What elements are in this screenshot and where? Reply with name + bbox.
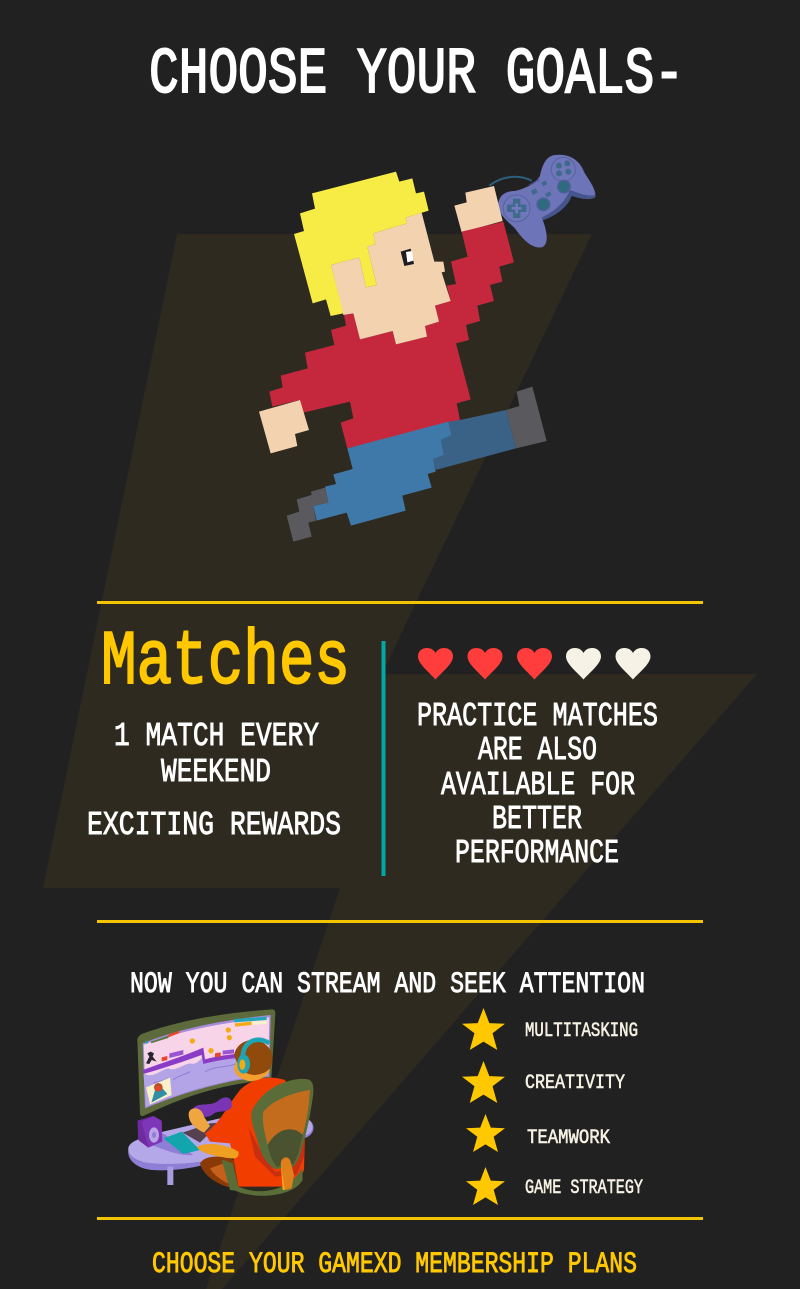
right hand — [454, 186, 503, 232]
label: game strategy: GAME STRATEGY — [525, 1177, 643, 1200]
eye — [401, 249, 414, 266]
desk — [128, 1118, 314, 1185]
star: creativity — [462, 1061, 505, 1103]
game controller held — [193, 1097, 232, 1117]
bottom divider — [97, 1217, 703, 1220]
text: match schedule — [114, 718, 319, 791]
top divider — [97, 601, 703, 604]
vertical divider — [382, 641, 386, 876]
label: teamwork: TEAMWORK — [527, 1127, 610, 1150]
text: match schedule: WEEKEND — [161, 754, 271, 791]
heading: Matches: Matches — [101, 620, 350, 707]
speaker — [138, 1116, 162, 1148]
text: practice matches: ARE ALSO — [478, 732, 597, 769]
text: practice matches: PERFORMANCE — [455, 835, 619, 872]
skills list — [462, 1008, 643, 1205]
text: rewards: EXCITING REWARDS — [87, 807, 341, 844]
star: teamwork — [466, 1114, 505, 1152]
shirt — [269, 222, 514, 448]
hearts rating — [418, 648, 650, 680]
mouse mat — [163, 1132, 200, 1154]
monitor — [137, 1009, 275, 1116]
controller cable — [489, 177, 532, 186]
game controller — [498, 155, 596, 247]
background lightning bolt — [43, 234, 757, 1289]
star: multitasking — [462, 1008, 505, 1050]
text: practice matches: AVAILABLE FOR — [441, 767, 635, 804]
text: practice matches: PRACTICE MATCHES — [417, 698, 658, 735]
light trouser leg — [313, 422, 452, 526]
face — [331, 213, 451, 344]
office chair — [197, 1079, 313, 1196]
left boot — [287, 488, 328, 542]
legs — [200, 1157, 238, 1189]
illustration: streamer at desk — [128, 1009, 314, 1196]
pixel character with controller — [259, 155, 596, 542]
right boot — [506, 387, 547, 448]
star: game strategy — [466, 1167, 505, 1205]
keyboard — [183, 1123, 220, 1143]
dark trouser leg — [433, 410, 516, 470]
footer call to action: CHOOSE YOUR GAMEXD MEMBERSHIP PLANS — [152, 1248, 637, 1282]
text: match schedule: 1 MATCH EVERY — [114, 718, 319, 755]
text: practice matches: BETTER — [492, 801, 582, 838]
head — [234, 1040, 273, 1081]
person body — [205, 1078, 305, 1187]
stream heading: NOW YOU CAN STREAM AND SEEK ATTENTION — [130, 968, 645, 1002]
middle divider — [97, 920, 703, 923]
left hand — [259, 400, 309, 453]
label: multitasking: MULTITASKING — [525, 1020, 638, 1043]
dark shirt shadow — [248, 1127, 304, 1177]
hair — [294, 172, 429, 316]
text: practice matches — [417, 698, 658, 872]
label: creativity: CREATIVITY — [525, 1072, 625, 1095]
hand and forearm — [189, 1108, 210, 1133]
